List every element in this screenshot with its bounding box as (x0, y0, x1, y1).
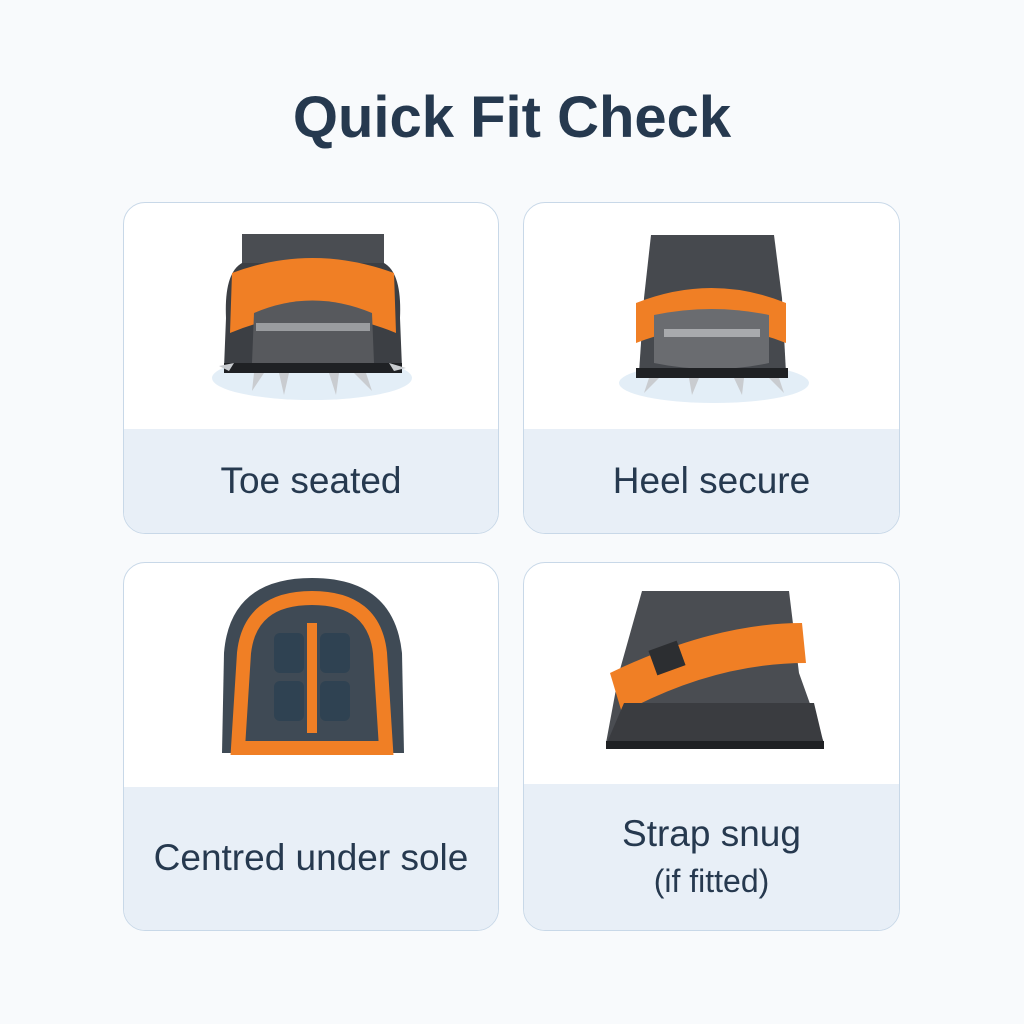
label: Strap snug (622, 813, 801, 854)
illustration: boot with strap (606, 591, 824, 749)
title: Quick Fit Check (293, 85, 731, 150)
label: Centred under sole (154, 837, 468, 878)
panel: toe seated (123, 202, 499, 534)
label: Heel secure (613, 460, 810, 501)
label (124, 787, 498, 930)
label (124, 429, 498, 533)
illustration: sole from below (222, 578, 404, 755)
illustration: heel boot back (619, 235, 809, 403)
label (524, 784, 899, 930)
label (524, 429, 899, 533)
panel: strap snug (523, 562, 900, 931)
panel: centred under sole (123, 562, 499, 931)
label: Toe seated (220, 460, 402, 501)
panel: heel secure (523, 202, 900, 534)
illustration: toe boot front (212, 234, 412, 400)
label: (if fitted) (654, 863, 769, 899)
